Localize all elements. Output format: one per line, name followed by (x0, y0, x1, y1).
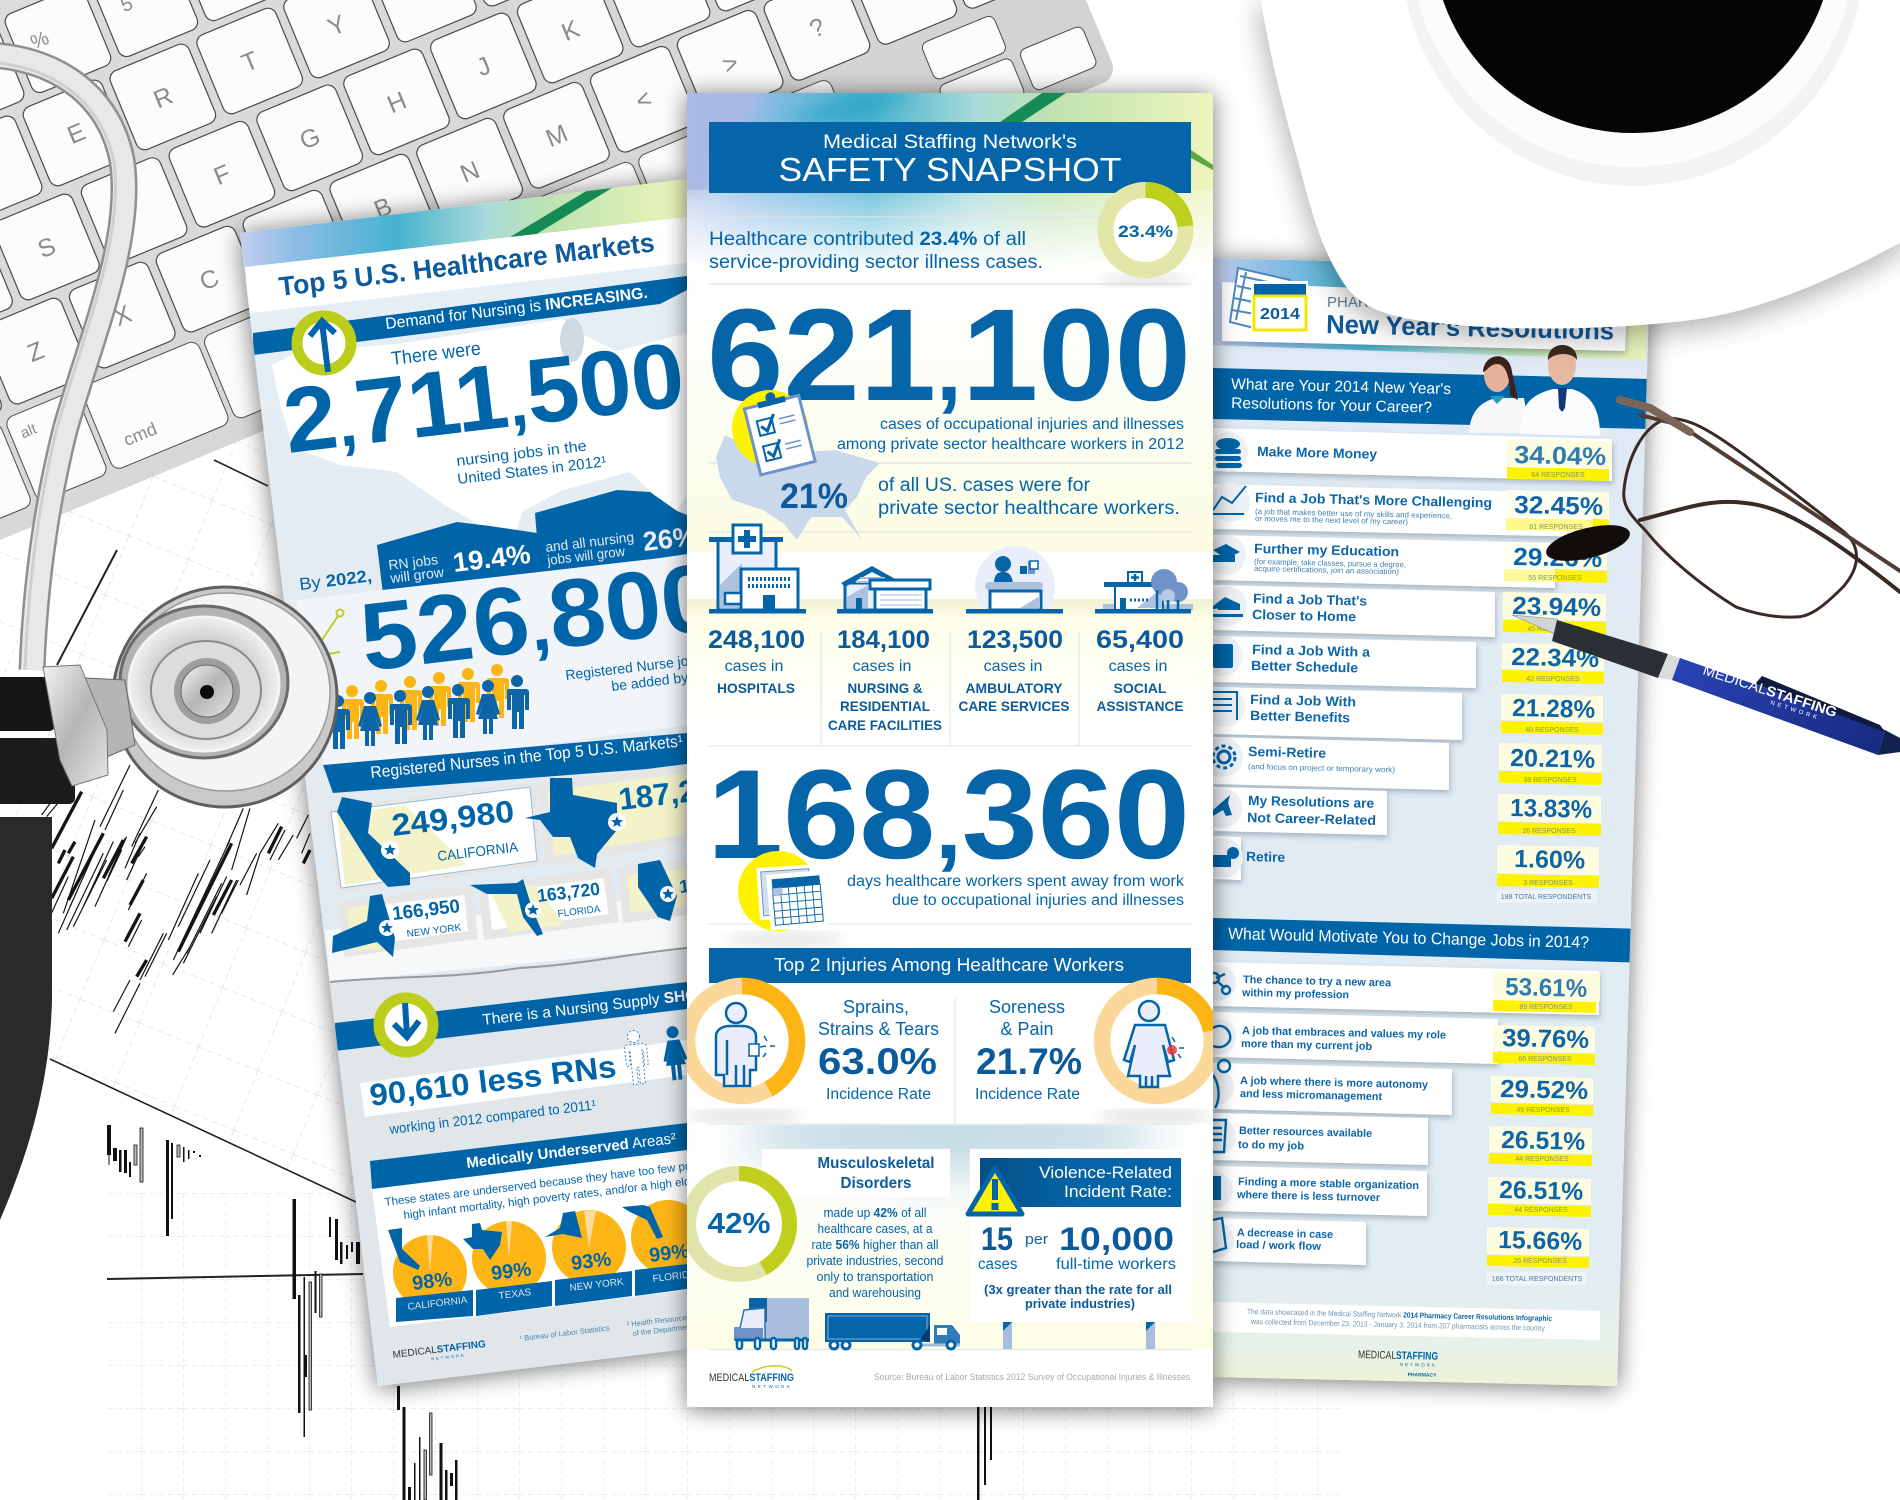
band: medically underserved (370, 1123, 687, 1189)
stat: 15 per 10,000 (978, 1221, 1176, 1273)
candlestick chart: diagonal on upper sheet (42, 765, 310, 1033)
stat: sprains: Sprains, (843, 997, 909, 1017)
icons: motivation icons (1197, 965, 1236, 1258)
stat: 15 per 10,000: full-time workers (1056, 1256, 1176, 1273)
donut: sprains figure (687, 986, 803, 1122)
text: registered nurse jobs: Registered Nurse jobs (564, 651, 704, 683)
left panel: Top 5 U.S. Healthcare Markets (224, 166, 687, 1404)
list: resolution sublabels: (for example, take classes, pursue a degree, (1254, 557, 1406, 569)
chart: resolution percentages: 21.28% (1512, 694, 1595, 724)
text: days away from work: due to occupational injuries and illnesses (892, 892, 1184, 909)
big number: 168,360: 168,360 (707, 743, 1190, 885)
list: resolution labels (1246, 444, 1492, 865)
heading (980, 1158, 1181, 1207)
stat: soreness: & Pain (1000, 1019, 1054, 1039)
list: motivation labels: Better resources available (1239, 1125, 1372, 1140)
text: underserved description: These states are underserved because they have too few primary care physicians, (384, 1147, 802, 1209)
stat: 15 per 10,000: 15 (981, 1221, 1013, 1257)
stethoscope tube: clear tubing (0, 55, 124, 670)
card: Illinois: 1 (678, 876, 690, 897)
chart: resolution percentages (1497, 439, 1612, 903)
great lakes (560, 318, 584, 362)
list: motivation labels: The chance to try a new area (1243, 974, 1392, 989)
chart: motivation percentages: 26.51% (1501, 1126, 1585, 1156)
keyboard: > (718, 48, 743, 80)
card: Florida (470, 873, 614, 936)
list: resolution labels: Not Career-Related (1247, 810, 1376, 828)
band: change jobs question: What Would Motivate You to Change Jobs in 2014? (1228, 925, 1589, 952)
card: New York: NEW YORK (406, 923, 462, 940)
ivory panel below band (687, 599, 1213, 729)
stat: ambulatory (958, 626, 1070, 714)
stat: social assistance: SOCIAL (1114, 680, 1167, 696)
white title strip: New Year's Resolutions (1326, 309, 1614, 346)
card: Texas (525, 768, 732, 868)
chart: resolution percentages: 42 RESPONSES (1526, 676, 1580, 683)
US map light (716, 435, 880, 540)
keyboard: C (196, 264, 223, 296)
big number: 621,100: 621,100 (707, 281, 1191, 428)
stat: 15 per 10,000: per (1025, 1231, 1048, 1248)
keyboard: N (456, 156, 484, 189)
left footer logo: MEDICALSTAFFING (392, 1339, 487, 1361)
text: nursing jobs: United States in 2012¹ (456, 453, 607, 488)
chart: motivation percentages: 26 RESPONSES (1513, 1258, 1567, 1265)
chart: state percentage circles: 98% (411, 1268, 454, 1295)
donut: 42%: 42% (708, 1208, 771, 1240)
left footnotes: ² Health Resources and Services (626, 1307, 736, 1329)
text: days away from work: days healthcare workers spent away from work (847, 873, 1184, 890)
chart: resolution percentages: 45 RESPONSES (1527, 626, 1581, 633)
box: musculoskeletal heading (762, 1149, 950, 1197)
box: violence related (968, 1149, 1191, 1322)
keyboard: K (558, 15, 584, 47)
band: resolutions question: Resolutions for Your Career? (1231, 395, 1433, 417)
torn paper shortage section (330, 948, 687, 1386)
header bar (709, 122, 1191, 193)
list: motivation labels (1236, 974, 1446, 1253)
band: supply shortage: There is a Nursing Supply SHORTAGE (481, 980, 751, 1029)
US map background (272, 319, 687, 538)
stat: hospitals (708, 626, 805, 696)
stat: nursing facilities: RESIDENTIAL (840, 698, 930, 714)
text: musculoskeletal description: healthcare cases, at a (818, 1222, 933, 1236)
light section behind 526,800 (296, 555, 687, 775)
icon: hospital (709, 525, 806, 614)
card: Florida: FLORIDA (557, 904, 601, 920)
stat: ambulatory: 123,500 (967, 626, 1063, 654)
title: Top 5 U.S. Healthcare Markets (277, 227, 656, 302)
list: resolution labels: Find a Job With (1250, 692, 1356, 709)
intro text: Healthcare contributed 23.4% of all (709, 229, 1026, 250)
chart: resolution percentages: 29.26% (1513, 543, 1602, 573)
stat: social assistance (1096, 626, 1184, 714)
panel top swirl (240, 179, 687, 280)
chart: state percentage circles (388, 1200, 705, 1322)
list: motivation labels: A job where there is more autonomy (1240, 1075, 1429, 1091)
callout: all nursing grow: and all nursing (544, 529, 635, 555)
stat: hospitals: cases in (725, 658, 783, 675)
text: musculoskeletal description: made up 42% of all (824, 1206, 926, 1220)
keyboard: F (210, 159, 235, 191)
chart: motivation percentages: 89 RESPONSES (1519, 1004, 1573, 1011)
list: resolution strips (1213, 428, 1612, 880)
card: Illinois (622, 860, 690, 921)
intro text (709, 229, 1043, 273)
footer data note: The data showcased in the Medical Staffing Network 2014 Pharmacy Career Resolutions Infographic (1247, 1307, 1552, 1323)
chart: state percentage circles: NEW YORK (569, 1277, 625, 1294)
text: musculoskeletal description: only to transportation (816, 1270, 934, 1284)
heading bar: top 2 injuries (709, 948, 1191, 983)
chart: resolution percentages: 32.45% (1514, 491, 1603, 521)
stat: nursing facilities: CARE FACILITIES (828, 717, 942, 733)
keyboard: T (238, 46, 262, 78)
donut: 23.4% (1100, 190, 1190, 286)
logo: MEDICALSTAFFING (709, 1372, 794, 1384)
chart: motivation percentages: 44 RESPONSES (1515, 1156, 1569, 1163)
list: resolution sublabels: (a job that makes better use of my skills and experience, (1255, 507, 1452, 520)
chart: motivation percentages: 53.61% (1505, 973, 1587, 1003)
stat: sprains (818, 997, 939, 1103)
chart: resolution percentages: 13.83% (1510, 794, 1592, 824)
keyboard: B (370, 192, 396, 224)
keyboard: < (632, 84, 656, 116)
subtitle: Medical Staffing Network's (823, 131, 1077, 153)
text: cases of occupational: cases of occupational injuries and illnesses (880, 416, 1184, 433)
icons: resolution icons (1202, 432, 1250, 878)
chart: resolution percentages: 20.21% (1510, 744, 1595, 774)
icon: warning triangle (968, 1168, 1022, 1214)
keyboard: X (110, 300, 136, 332)
posts (1003, 1322, 1155, 1349)
text: musculoskeletal description: private industries, second (806, 1254, 944, 1268)
list: motivation strips (1213, 962, 1599, 1265)
stat: hospitals: HOSPITALS (717, 680, 795, 696)
stat: ambulatory: cases in (984, 658, 1042, 675)
text: musculoskeletal description: and warehousing (829, 1286, 921, 1300)
text: registered nurse jobs: be added by (610, 669, 689, 694)
list: resolution labels: Make More Money (1257, 444, 1378, 462)
keyboard: J (473, 52, 495, 82)
list: resolution labels: Find a Job That's More Challenging (1255, 490, 1492, 510)
text: of all US cases: of all US. cases were for (878, 475, 1091, 496)
chart: motivation percentages: 39.76% (1502, 1024, 1589, 1054)
chart: motivation percentages: 26.51% (1499, 1176, 1583, 1206)
callout: RN jobs grow: will grow (388, 564, 446, 586)
list: resolution labels: Better Benefits (1250, 708, 1350, 725)
text: cases of occupational (837, 416, 1184, 453)
icon: nursing facility (837, 566, 933, 614)
chart: resolution percentages: 23.94% (1512, 592, 1601, 622)
text: cases of occupational: among private sector healthcare workers in 2012 (837, 436, 1184, 453)
big number: 2,711,500: 2,711,500 (278, 324, 690, 473)
list: resolution labels: Closer to Home (1252, 607, 1357, 624)
text: nursing jobs (457, 442, 606, 484)
donut: 23.4%: 23.4% (1118, 222, 1173, 241)
chart: resolution percentages: 55 RESPONSES (1528, 575, 1582, 582)
chart: motivation percentages: 66 RESPONSES (1518, 1056, 1572, 1063)
white strip: 90,610 less RNs: 90,610 less RNs (368, 1049, 618, 1113)
list: resolution labels: Find a Job That's (1253, 591, 1367, 609)
chart: resolution percentages: 61 RESPONSES (1529, 524, 1583, 531)
card: Texas: 187,240 (617, 769, 732, 817)
right footer logo: MEDICALSTAFFING (1358, 1349, 1438, 1363)
list: resolution labels: Better Schedule (1251, 658, 1359, 675)
chart: state percentage circles: 99% (490, 1258, 533, 1285)
callout: RN jobs grow (377, 522, 542, 594)
band: change jobs question (1213, 918, 1650, 963)
chart: state percentage circles: 99% (648, 1240, 691, 1267)
chart: resolution percentages: 64 RESPONSES (1531, 472, 1585, 479)
stat: 15 per 10,000: cases (978, 1256, 1018, 1273)
keyboard: % (28, 27, 53, 54)
panel top swirl (680, 85, 1213, 552)
list: motivation labels: A decrease in case (1237, 1227, 1333, 1241)
text: days away from work (847, 873, 1184, 909)
list: motivation labels: where there is less turnover (1236, 1189, 1381, 1204)
background: lower section (687, 1097, 1213, 1349)
stat: soreness (975, 997, 1082, 1103)
list: resolution sublabels: or moves me to the next level of my career) (1255, 514, 1409, 526)
stat: ambulatory: AMBULATORY (966, 680, 1063, 696)
pen logo text: NETWORK (1769, 700, 1820, 722)
white band behind icons (687, 552, 1213, 599)
text: musculoskeletal description: rate 56% higher than all (812, 1238, 938, 1252)
logo: NETWORK (752, 1384, 792, 1389)
band: resolutions question (1213, 368, 1650, 429)
white strip: 90,610 less RNs (360, 1040, 687, 1117)
keyboard: G (296, 122, 324, 155)
white box: underserved (372, 1150, 687, 1327)
stat: nursing facilities: NURSING & (848, 680, 922, 696)
band: registered nurses: Registered Nurses in the Top 5 U.S. Markets¹ (370, 732, 684, 782)
calendar 2014 icon: 2014 (1260, 306, 1300, 323)
list: resolution labels: Find a Job With a (1252, 642, 1371, 660)
text: by 2022: By 2022, (298, 566, 373, 594)
light strip above torn paper (325, 895, 687, 982)
stat: nursing facilities: 184,100 (837, 626, 930, 654)
chart: motivation percentages: 29.52% (1500, 1075, 1588, 1105)
keyboard: S (34, 232, 60, 264)
pen (1512, 615, 1900, 755)
stat: nursing facilities (828, 626, 942, 733)
icon: down arrow in green ring (379, 998, 433, 1052)
list: resolution labels: Further my Education (1254, 541, 1399, 559)
band: registered nurses (323, 732, 687, 793)
footer data note: was collected from December 23, 2013 - January 3, 2014 from 207 pharmacists across the country (1250, 1317, 1545, 1333)
left footer logo: NETWORK (431, 1352, 466, 1361)
coffee (1433, 0, 1833, 133)
keyboard: H (383, 86, 411, 119)
stat: 15 per 10,000: 10,000 (1059, 1221, 1174, 1257)
card: New York: 166,950 (391, 896, 461, 925)
chart: state percentage circles: TEXAS (498, 1287, 532, 1302)
stat: social assistance: 65,400 (1096, 626, 1184, 654)
text: of all US cases (878, 475, 1180, 519)
icon: ambulatory care (966, 546, 1063, 614)
chart: motivation percentages: 166 TOTAL RESPONDENTS (1492, 1276, 1583, 1283)
list: resolution sublabels (1248, 507, 1452, 774)
heading bar: top 2 injuries: Top 2 Injuries Among Healthcare Workers (774, 954, 1124, 975)
footer data note (1213, 1302, 1600, 1340)
panel top swirl (1213, 258, 1650, 360)
right footer logo: PHARMACY (1408, 1372, 1437, 1379)
stat: soreness: 21.7% (976, 1041, 1082, 1082)
callout: RN jobs grow: RN jobs (387, 551, 439, 573)
stat: 21%: 21% (780, 477, 848, 516)
list: resolution labels: Semi-Retire (1248, 744, 1327, 761)
chart: motivation percentages (1487, 971, 1600, 1285)
list: motivation labels: and less micromanagement (1240, 1088, 1382, 1103)
donut: 42% (688, 1174, 790, 1274)
stat: sprains: 63.0% (818, 1041, 937, 1082)
stat: sprains: Incidence Rate (826, 1086, 931, 1103)
icon: network node (322, 610, 344, 655)
stat: sprains: Strains & Tears (818, 1019, 939, 1039)
source: Source: Bureau of Labor Statistics 2012 Survey of Occupational Injuries & Illnesses (874, 1372, 1191, 1382)
demand band: Demand for Nursing is INCREASING. (384, 285, 649, 333)
card: New York (332, 890, 473, 957)
right panel: New Year's Resolutions (1197, 258, 1650, 1386)
intro text: service-providing sector illness cases. (709, 252, 1043, 273)
black tubing (0, 677, 55, 731)
icon: up arrow in green ring (297, 316, 351, 372)
band: resolutions question: What are Your 2014 New Year's (1231, 376, 1451, 398)
list: motivation labels: to do my job (1238, 1139, 1304, 1153)
text: musculoskeletal description (806, 1206, 944, 1300)
keyboard: cmd (121, 419, 160, 450)
card: California: CALIFORNIA (436, 838, 519, 864)
heading: Incident Rate: (1064, 1182, 1172, 1201)
list: resolution sublabels: acquire certifications, join an association) (1254, 564, 1400, 576)
logo (709, 1366, 794, 1389)
card: Florida: 163,720 (536, 879, 601, 906)
keyboard: R (150, 81, 177, 114)
chart: resolution percentages: 1.60% (1514, 845, 1585, 875)
stethoscope black tubes and chest piece (0, 587, 337, 1220)
right footer logo (1358, 1349, 1438, 1379)
center panel: Safety Snapshot (680, 85, 1213, 1407)
chart: motivation percentages: 15.66% (1498, 1226, 1582, 1256)
chest piece (113, 587, 337, 807)
keyboard: E (63, 118, 89, 150)
candlestick chart: lower sheet (107, 1125, 992, 1500)
stat: social assistance: cases in (1109, 658, 1167, 675)
photo: nurse and doctor (1469, 345, 1600, 436)
right footer logo: NETWORK (1400, 1362, 1437, 1368)
callout: all nursing grow: jobs will grow (546, 543, 627, 568)
card: California (331, 787, 537, 888)
list: motivation labels: load / work flow (1236, 1239, 1322, 1253)
icon: clipboard (732, 386, 815, 475)
title: PHARMACY CAREER (1327, 294, 1479, 311)
text: nursing jobs: nursing jobs in the (455, 438, 588, 470)
callout: RN jobs grow: 19.4% (451, 539, 532, 578)
stat: soreness: Soreness (989, 997, 1065, 1017)
band: medically underserved: Medically Underserved Areas² (465, 1130, 677, 1172)
keyboard: ? (806, 13, 829, 44)
band: supply shortage (335, 980, 751, 1051)
white title strip (245, 217, 687, 313)
list: resolution labels: Retire (1246, 849, 1286, 865)
stat: hospitals: 248,100 (708, 626, 805, 654)
text: working in 2012: working in 2012 compared to 2011¹ (388, 1096, 597, 1137)
chart: resolution percentages: 26 RESPONSES (1522, 828, 1576, 835)
glasses (1543, 400, 1900, 617)
chart: state percentage circles: CALIFORNIA (407, 1295, 468, 1313)
stat: soreness: Incidence Rate (975, 1086, 1080, 1103)
chart: state percentage circles: 93% (570, 1248, 613, 1275)
left footnotes (519, 1307, 736, 1343)
list: resolution sublabels: (and focus on project or temporary work) (1248, 762, 1396, 774)
donut: soreness figure (1097, 986, 1213, 1122)
icon: box truck (735, 1298, 809, 1349)
text: of all US cases: private sector healthcare workers. (878, 498, 1180, 519)
heading: Violence-Related (1039, 1163, 1172, 1182)
callout: all nursing grow (535, 490, 687, 572)
list: motivation labels: A job that embraces and values my role (1242, 1025, 1446, 1042)
chart: resolution percentages: 34.04% (1514, 441, 1606, 471)
text: 3x greater: private industries) (1025, 1297, 1135, 1311)
left footnotes: of the Department of Health (632, 1318, 725, 1338)
list: motivation labels: Finding a more stable organization (1238, 1176, 1419, 1192)
chart: resolution percentages: 22.34% (1511, 643, 1599, 673)
list: resolution labels: My Resolutions are (1248, 793, 1375, 811)
text: underserved description: high infant mortality, high poverty rates, and/or a high elderly population. (403, 1167, 769, 1222)
card: California: 249,980 (390, 794, 516, 843)
chart: motivation percentages: 44 RESPONSES (1514, 1207, 1568, 1214)
keyboard: Z (23, 336, 48, 368)
stat: social assistance: ASSISTANCE (1096, 698, 1184, 714)
keyboard: alt (18, 420, 40, 442)
icon: semi truck (825, 1313, 960, 1349)
box: musculoskeletal heading: Disorders (840, 1175, 912, 1192)
calendar 2014 icon (1230, 268, 1308, 334)
keyboard (0, 0, 1118, 617)
text: there were: There were (390, 338, 482, 370)
keyboard: M (542, 119, 572, 153)
chart: resolution percentages: 40 RESPONSES (1525, 727, 1579, 734)
stat: ambulatory: CARE SERVICES (958, 698, 1070, 714)
title: SAFETY SNAPSHOT (778, 151, 1122, 188)
stat: nursing facilities: cases in (853, 658, 911, 675)
chart: motivation percentages: 49 RESPONSES (1516, 1107, 1570, 1114)
pen logo text: MEDICALSTAFFING (1701, 662, 1839, 720)
text: 3x greater: (3x greater than the rate for all (984, 1283, 1172, 1297)
coffee cup and saucer (1260, 0, 1900, 328)
list: motivation labels: within my profession (1241, 987, 1349, 1001)
left footnotes: ¹ Bureau of Labor Statistics (519, 1323, 610, 1343)
chart: state percentage circles: FLORIDA (652, 1269, 697, 1285)
icon: calendar (725, 851, 845, 948)
white title strip (1222, 268, 1627, 351)
icon: social assistance (1095, 569, 1193, 614)
demand band (253, 276, 687, 355)
icon: dotted and solid person (623, 1025, 690, 1085)
big number: 526,800: 526,800 (355, 543, 723, 692)
text: 3x greater (984, 1283, 1172, 1311)
chart: resolution percentages: 38 RESPONSES (1523, 777, 1577, 784)
people row (328, 664, 529, 749)
chart: resolution percentages: 188 TOTAL RESPONDENTS (1501, 894, 1592, 901)
chart: resolution percentages: 3 RESPONSES (1523, 880, 1573, 887)
keyboard: Y (324, 10, 350, 42)
list: motivation labels: more than my current job (1241, 1038, 1372, 1053)
callout: all nursing grow: 26% (641, 521, 698, 557)
box: musculoskeletal heading: Musculoskeletal (818, 1155, 934, 1172)
